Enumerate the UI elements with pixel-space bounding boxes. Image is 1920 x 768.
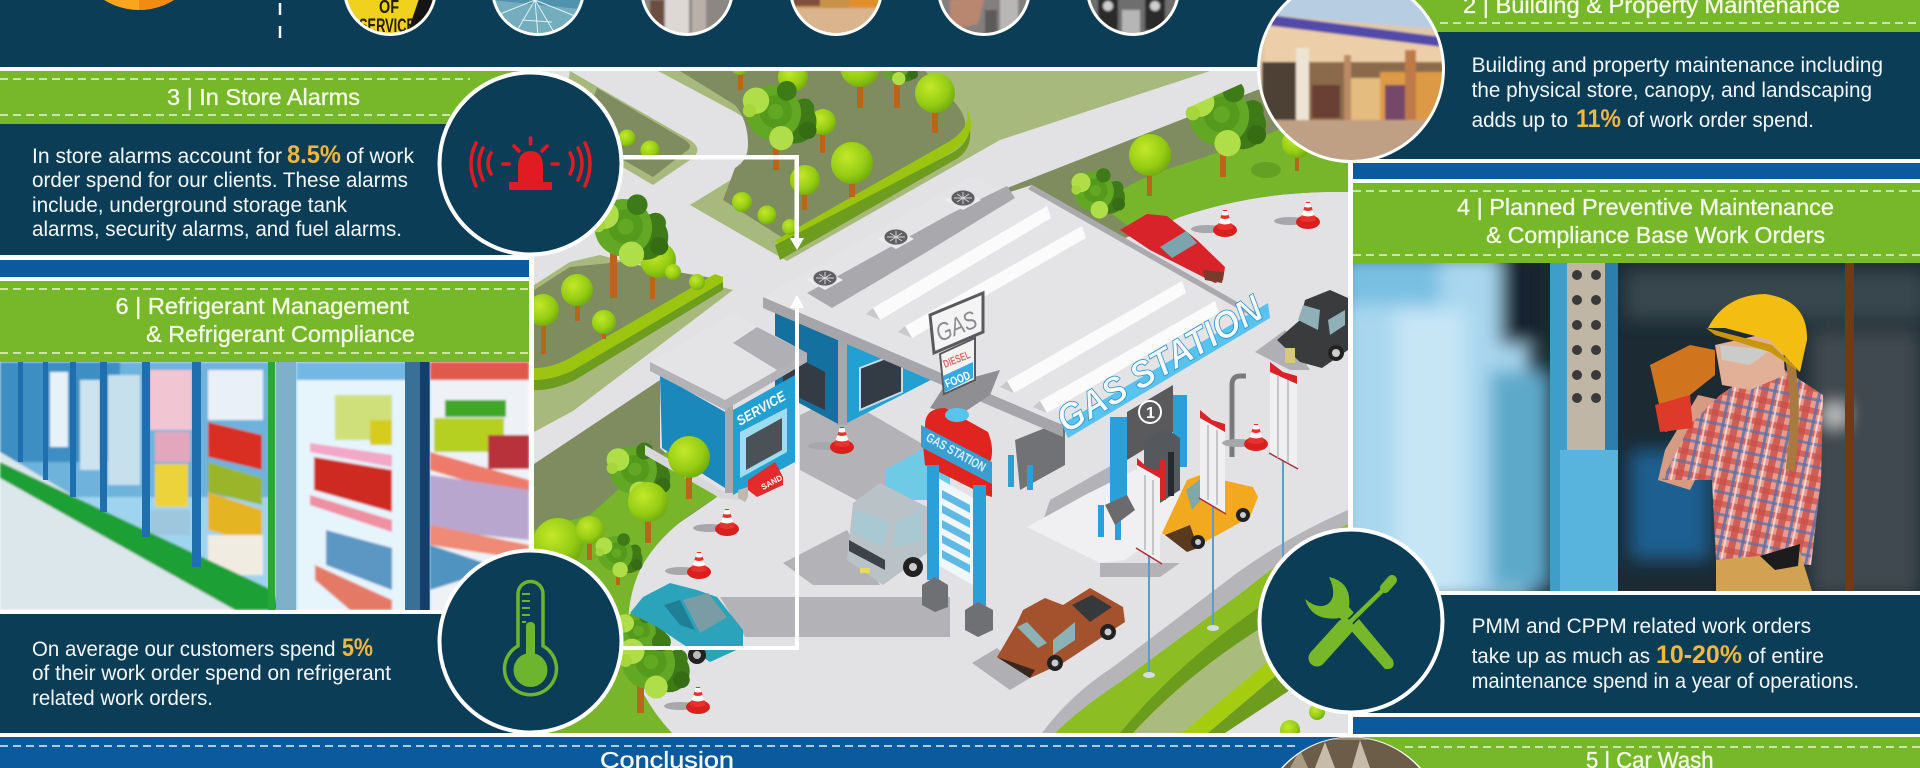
vehicle: red car	[1120, 214, 1225, 283]
vehicle: truck	[847, 445, 950, 585]
tree: beside kiosk	[668, 436, 710, 499]
fuel pump: centre	[1144, 428, 1180, 503]
map: isometric gas station scene	[527, 47, 1348, 740]
tree row	[732, 71, 955, 235]
icon: red siren	[471, 138, 590, 190]
text: building body: adds up to	[1472, 109, 1568, 132]
text: planned maintenance body: PMM and CPPM related work orders	[1472, 615, 1811, 638]
text: alarms body	[32, 141, 415, 241]
text: planned maintenance body: 10-20%	[1656, 641, 1742, 669]
vehicle: black jeep	[1255, 290, 1348, 370]
canopy and pumps: 1	[1146, 405, 1155, 422]
photo icon: gauges	[641, 0, 733, 36]
photo: worker in hard hat	[1340, 255, 1920, 600]
photo circle: car wash	[1255, 735, 1447, 768]
signage: canopy fascia: GAS STATION	[1049, 287, 1272, 442]
icon: thermometer	[504, 582, 556, 695]
road strip and lower left lawn	[533, 362, 717, 733]
band: blue right upper	[1353, 163, 1920, 179]
photo icon: out of service	[344, 0, 436, 36]
band: blue left	[0, 260, 529, 277]
roof: main store and canopy	[763, 177, 1255, 437]
worker figure	[1650, 294, 1823, 591]
text: refrigerant body: On average our customers spend	[32, 638, 336, 661]
signage: gas diesel food: FOOD	[943, 368, 972, 391]
text: refrigerant body	[32, 634, 391, 710]
panel: building and property maintenance	[1353, 0, 1920, 159]
island: left with trees and hedge	[527, 194, 733, 432]
text: planned maintenance body	[1472, 615, 1859, 693]
text: building body: Building and property maintenance including	[1472, 54, 1883, 77]
island: small top left	[560, 71, 698, 185]
panel: car wash	[1255, 735, 1920, 768]
signage: gas diesel food: DIESEL	[942, 349, 972, 371]
vehicle: brown pickup	[972, 588, 1125, 690]
connector: refrigerant to store	[620, 295, 804, 650]
lawn: top right	[1008, 84, 1348, 238]
canopy and pumps	[1008, 385, 1187, 540]
photo icon: truck tires	[1087, 0, 1179, 36]
text: building body: the physical store, canopy, and landscaping	[1472, 79, 1872, 102]
traffic cones	[664, 202, 1320, 714]
icon circle: thermometer	[440, 550, 622, 732]
fuel pump: left	[1008, 420, 1065, 490]
text: alarms body: In store alarms account for	[32, 145, 282, 168]
text: building body: 11%	[1576, 105, 1621, 133]
heading: refrigerant management: & Refrigerant Compliance	[146, 321, 415, 347]
signage: price pylon	[921, 408, 993, 637]
text: refrigerant body: of their work order spend on refrigerant	[32, 662, 391, 685]
text: alarms body: 8.5%	[287, 141, 341, 169]
island: top centre with trees	[658, 71, 1210, 261]
text: alarms body: alarms, security alarms, and fuel alarms.	[32, 218, 402, 241]
box: red sand bin: SAND	[760, 473, 784, 492]
heading: planned preventive maintenance: & Compliance Base Work Orders	[1486, 222, 1825, 248]
text: refrigerant body: related work orders.	[32, 687, 213, 710]
text: alarms body: order spend for our clients. These alarms	[32, 169, 408, 192]
band: blue right lower	[1353, 717, 1920, 734]
box: red sand bin	[738, 462, 784, 502]
flagpoles with banners	[1136, 362, 1298, 678]
text: refrigerant body: 5%	[342, 634, 373, 662]
text: planned maintenance body: of entire	[1748, 645, 1824, 668]
label: service sign: SERVICE	[734, 387, 789, 429]
icon circle: alarm	[440, 72, 622, 254]
divider: dashed vertical	[279, 3, 281, 38]
text: building body	[1472, 54, 1883, 133]
text: planned maintenance body: take up as much as	[1472, 645, 1650, 668]
panel: top navy band	[0, 0, 1300, 67]
heading: planned preventive maintenance: 4 | Planned Preventive Maintenance	[1457, 194, 1834, 220]
building: main store walls	[775, 313, 941, 425]
forecourt shadows	[720, 396, 1180, 637]
heading: in store alarms: 3 | In Store Alarms	[167, 84, 360, 110]
signage: gas diesel food	[930, 293, 1000, 415]
vehicle: orange pickup	[1162, 475, 1258, 552]
heading: planned preventive maintenance	[1457, 194, 1834, 248]
signage: price pylon: GAS STATION	[924, 430, 989, 475]
text: alarms body: include, underground storage tank	[32, 194, 347, 217]
road band: upper	[1186, 71, 1242, 108]
vehicle: teal car	[630, 583, 743, 664]
icon circle: tools	[1260, 530, 1442, 712]
text: building body: of work order spend.	[1627, 109, 1814, 132]
photo: refrigerated aisle	[0, 362, 529, 610]
connector: alarm to store	[622, 155, 804, 250]
photo icon: technician hands	[938, 0, 1030, 36]
photo icon: store interior	[790, 0, 882, 36]
heading: refrigerant management: 6 | Refrigerant Management	[116, 293, 410, 319]
rooftop vents	[807, 190, 981, 290]
text: planned maintenance body: maintenance spend in a year of operations.	[1472, 670, 1859, 693]
heading: refrigerant management	[116, 293, 415, 347]
pump island pad	[1028, 470, 1182, 563]
kerb and roadside lawn	[1042, 510, 1348, 740]
building: service kiosk	[645, 313, 807, 500]
panel: in store alarms	[0, 71, 530, 255]
signage: gas diesel food: GAS	[932, 306, 981, 348]
panel: refrigerant management	[0, 281, 530, 733]
photo icon: out of service: SERVICE	[359, 16, 415, 37]
lamp post	[1232, 376, 1246, 457]
panel: conclusion	[0, 737, 1360, 768]
photo circle: gas station canopy	[1255, 0, 1450, 170]
icon: orange circle	[73, 0, 205, 10]
photo icon: cracked glass	[492, 0, 584, 36]
text: alarms body: of work	[346, 145, 415, 168]
panel: planned preventive maintenance	[1340, 183, 1920, 713]
icon: wrench and screwdriver	[1305, 577, 1394, 669]
